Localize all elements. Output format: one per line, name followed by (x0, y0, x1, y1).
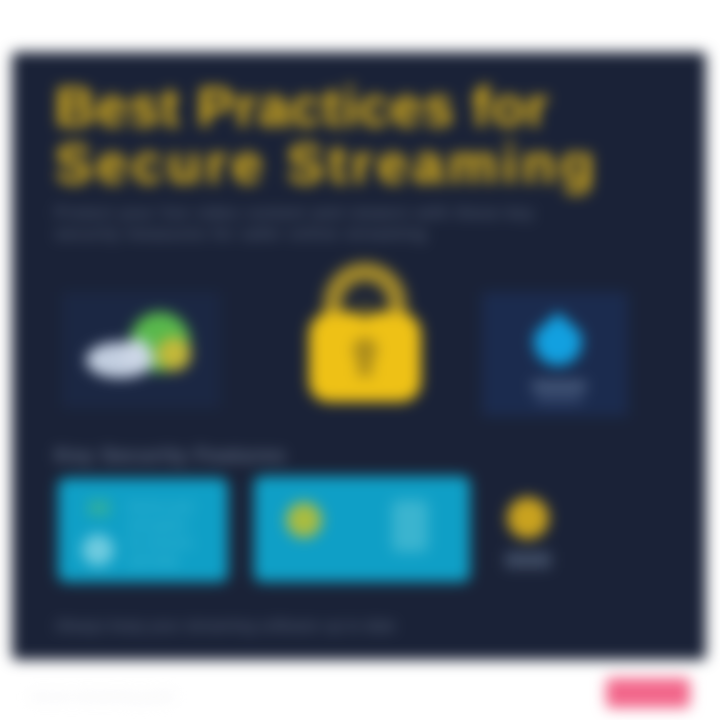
icon: blue shield (524, 306, 592, 407)
icon: light block (392, 500, 428, 552)
panel: cloud icon tile (62, 292, 220, 408)
subtitle text: Protect your live video content and viewers with these key (55, 205, 535, 222)
title (48, 75, 602, 205)
footer note: Always keep your streaming software up to date (55, 618, 396, 635)
subtitle text (55, 205, 535, 243)
icon: small green mark (88, 500, 110, 516)
badge label (505, 552, 551, 568)
icon: cloud and green circle (77, 302, 201, 388)
title: Best Practices for (55, 75, 549, 138)
card: access control (254, 476, 470, 582)
credit text: secure streaming guide (30, 688, 176, 704)
card text: encryption (128, 517, 188, 532)
subtitle text: security measures for safer online streaming (55, 226, 427, 243)
card text: End-to-end (128, 499, 192, 514)
card: encryption (58, 478, 228, 582)
title: Secure Streaming (55, 132, 598, 195)
card text: for streams (128, 535, 193, 550)
icon: central yellow padlock (298, 252, 432, 414)
card text: and data (128, 553, 179, 568)
panel: blue drop icon tile (482, 292, 628, 416)
section label: Key Security Features (55, 445, 286, 467)
button: pink tag (606, 678, 690, 708)
icon: card badge (82, 534, 114, 566)
icon: yellow dot (286, 502, 322, 538)
card text (128, 499, 193, 568)
icon: gold circle badge (507, 497, 549, 539)
